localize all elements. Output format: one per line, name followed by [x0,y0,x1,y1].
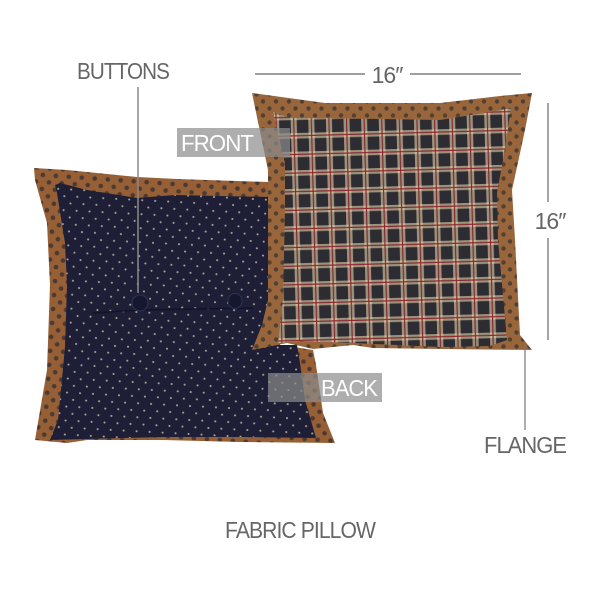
flange leader line [524,345,526,430]
back navy panel [50,183,316,440]
flange label: FLANGE [484,432,567,458]
back label [268,373,382,402]
height dimension: 16″ [535,208,566,234]
back flap seam [93,308,253,313]
icon: button left [132,295,148,311]
width dimension: 16″ [372,62,403,88]
panel: front of pillow [252,93,532,350]
buttons leader line [137,87,139,293]
title: FABRIC PILLOW [225,517,376,543]
back label: BACK [321,375,379,401]
buttons label: BUTTONS [77,58,170,84]
back flange [34,168,335,443]
front label: FRONT [181,130,254,156]
icon: button right [228,294,242,308]
panel: back of pillow [34,168,335,443]
front flange [252,93,532,350]
front plaid panel [273,108,511,347]
front label [177,128,290,157]
